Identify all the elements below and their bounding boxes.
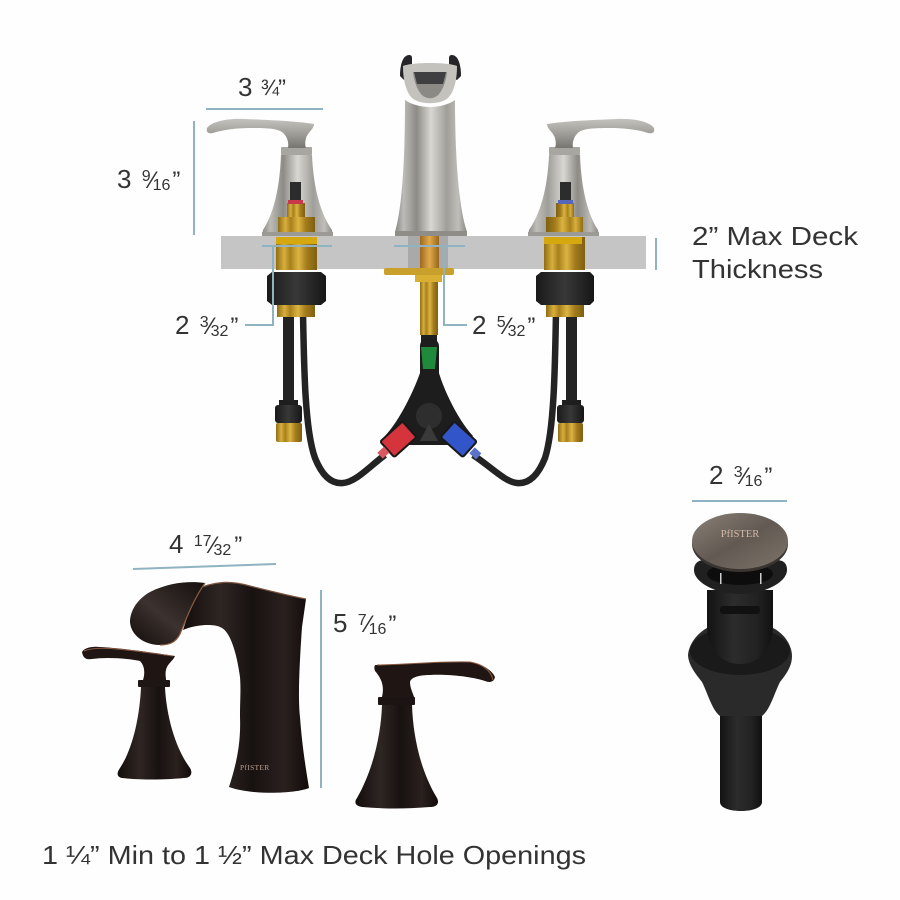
dimension: 2 5/32 spout: ⁄ — [501, 313, 514, 340]
dimension: 2 3/32 valve: 3 — [200, 314, 209, 331]
waterfall bowl — [130, 582, 205, 645]
red connector — [377, 422, 417, 459]
dimension: 2 3/32 valve: 2 — [175, 310, 189, 340]
dimension: 2 3/16 drain cap: ” — [764, 463, 772, 490]
center spout — [395, 55, 467, 236]
dimension: 2 3/32 valve — [175, 246, 332, 340]
spout body — [130, 582, 309, 793]
green connector — [421, 347, 437, 369]
dimension: max deck thickness: Thickness — [692, 254, 823, 284]
bronze faucet — [82, 582, 495, 808]
Y connector — [377, 338, 481, 459]
drain assembly — [688, 513, 792, 811]
left shank and nut — [267, 237, 326, 317]
dimension: 3 3/4 handle width: 3 — [238, 72, 252, 102]
left tube and fitting — [275, 317, 302, 442]
left valve body above deck — [207, 119, 333, 237]
left handle — [82, 647, 191, 780]
right supply hose — [473, 312, 556, 483]
dimension: 2 5/32 spout: 32 — [508, 323, 526, 340]
dimension: 3 9/16 handle height: 3 — [117, 164, 131, 194]
dimension: 4 17/32 spout reach: 32 — [214, 542, 231, 559]
dimension: 2 5/32 spout: ” — [527, 313, 535, 340]
drain cap — [692, 513, 788, 572]
right valve body above deck — [528, 119, 654, 237]
deck slab — [221, 236, 646, 269]
left supply hose — [303, 312, 385, 483]
dimension: 5 7/16 spout height — [320, 590, 396, 788]
dimension: 4 17/32 spout reach: ⁄ — [206, 532, 219, 559]
tail pipe — [720, 680, 762, 811]
dimension: 5 7/16 spout height: 5 — [333, 608, 347, 638]
dimension: 2 5/32 spout: 2 — [472, 310, 486, 340]
dimension: 3 3/4 handle width — [206, 72, 323, 110]
right tube and fitting — [557, 317, 584, 442]
caption: deck hole openings: 1 ¼” Min to 1 ½” Max Deck Hole Openings — [42, 840, 586, 870]
dimension: 3 9/16 handle height: ⁄ — [146, 167, 159, 194]
dimension: 5 7/16 spout height: ” — [388, 611, 396, 638]
dimension: 2 3/16 drain cap: ⁄ — [738, 463, 751, 490]
upper ring — [694, 560, 787, 594]
dimension: 2 3/16 drain cap: 3 — [734, 464, 743, 481]
dimension: 4 17/32 spout reach — [133, 529, 276, 569]
dimension: max deck thickness: 2” Max Deck — [692, 221, 859, 251]
dimension: 3 9/16 handle height: ” — [172, 167, 180, 194]
diagram: nickel faucet cross-section — [207, 55, 654, 483]
dimension: 2 3/16 drain cap — [692, 460, 787, 502]
logo: PfISTER — [240, 763, 270, 772]
dimension: 2 3/32 valve: ” — [230, 313, 238, 340]
center shank — [384, 236, 454, 343]
dimension: 3 3/4 handle width: ” — [278, 75, 286, 102]
dimension: 5 7/16 spout height: 16 — [369, 621, 387, 638]
dimension: 2 3/16 drain cap: 16 — [745, 473, 763, 490]
dimension: 2 3/32 valve: ⁄ — [204, 313, 217, 340]
dimension: 3 3/4 handle width: ¾ — [261, 75, 280, 100]
dimension: 2 3/16 drain cap: 2 — [709, 460, 723, 490]
dimension: 4 17/32 spout reach: 4 — [169, 529, 183, 559]
dimension: 2 5/32 spout: 5 — [497, 314, 506, 331]
dimension: 2 3/32 valve: 32 — [211, 323, 229, 340]
dimension: 3 9/16 handle height: 16 — [153, 177, 171, 194]
right handle — [355, 662, 495, 808]
blue connector — [440, 422, 481, 459]
lower flange — [688, 628, 792, 716]
right shank and nut — [536, 237, 594, 317]
logo: PfISTER — [721, 529, 759, 540]
dimension: max deck thickness — [655, 221, 859, 284]
dimension: 2 5/32 spout — [394, 246, 535, 340]
dimension: 5 7/16 spout height: ⁄ — [362, 611, 375, 638]
dimension: 3 9/16 handle height: 9 — [142, 168, 151, 185]
dimension: 3 9/16 handle height — [117, 121, 195, 235]
neck — [707, 590, 773, 664]
dimension: 4 17/32 spout reach: ” — [234, 532, 242, 559]
dimension: 4 17/32 spout reach: 17 — [194, 533, 212, 550]
dimension: 5 7/16 spout height: 7 — [358, 612, 367, 629]
